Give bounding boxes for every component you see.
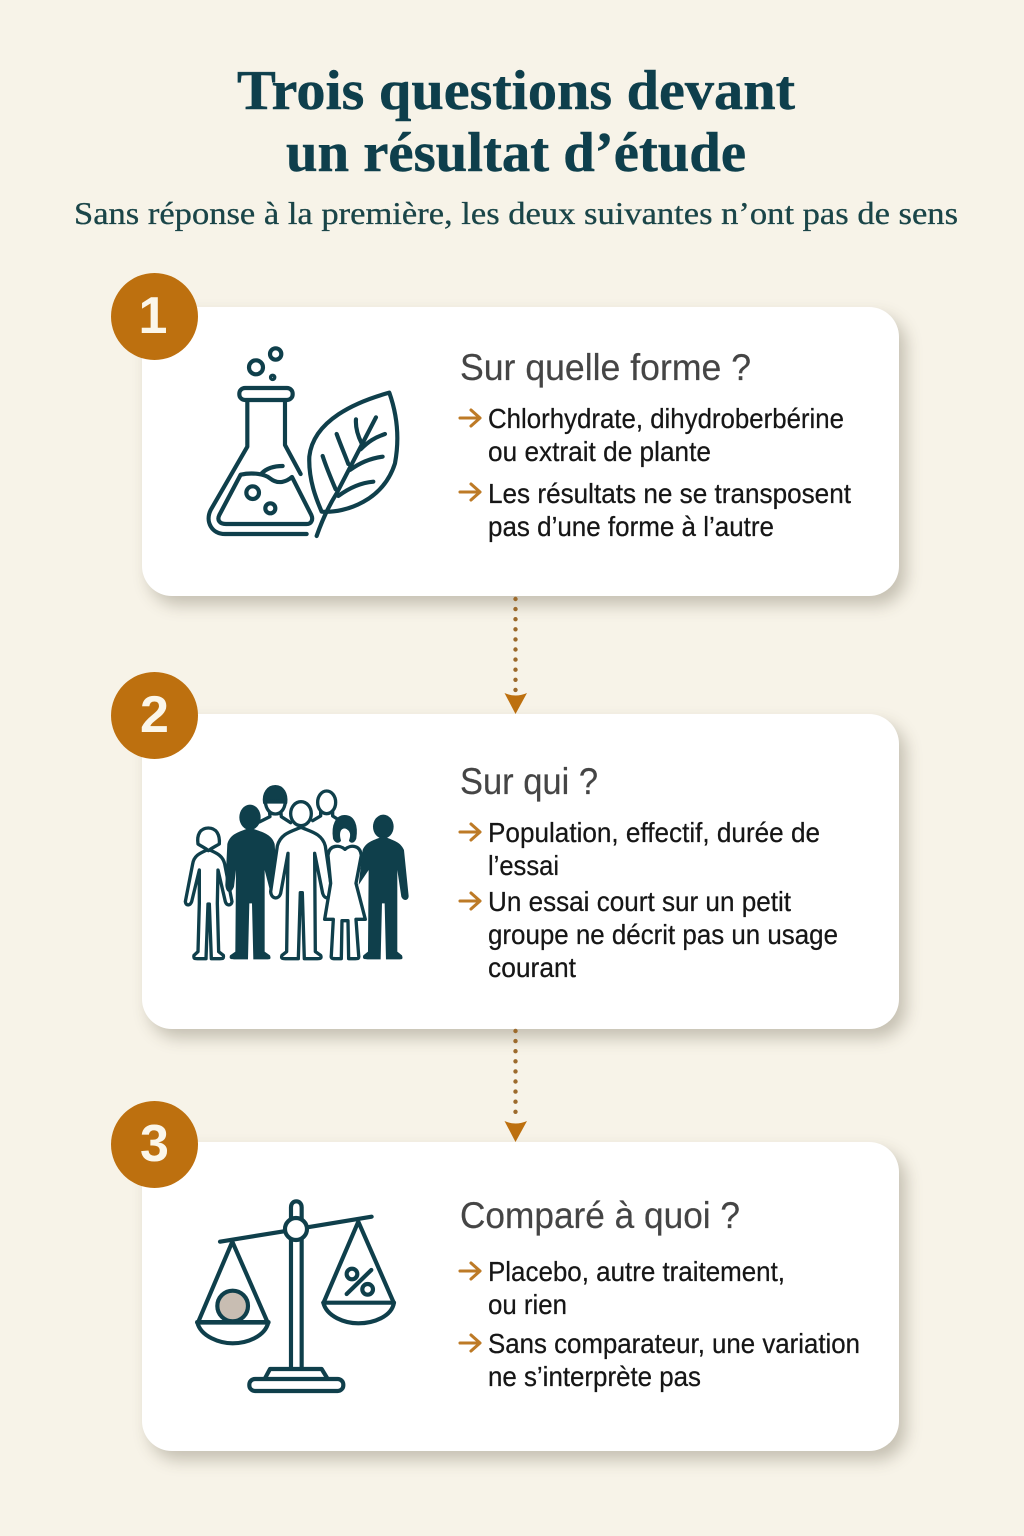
bullet 1: ou rien bbox=[488, 1289, 567, 1320]
heading: Sur quelle forme ? bbox=[460, 347, 751, 388]
bullet 1: Placebo, autre traitement, bbox=[488, 1256, 785, 1287]
bullet 1: ou extrait de plante bbox=[488, 436, 711, 467]
back woman bbox=[259, 787, 291, 823]
back man bbox=[313, 791, 340, 821]
dark man right bbox=[359, 815, 409, 959]
icon: flask and leaf bbox=[209, 348, 397, 536]
bullet 2: Un essai court sur un petit bbox=[488, 886, 791, 917]
arrow 2 to 3 bbox=[504, 1028, 527, 1142]
title: un résultat d’étude bbox=[286, 122, 746, 184]
left child bbox=[185, 828, 232, 959]
centre man bbox=[271, 802, 332, 959]
bullet 2: groupe ne décrit pas un usage bbox=[488, 919, 838, 950]
icon: balance scale bbox=[197, 1201, 394, 1391]
bullet 1 bbox=[460, 403, 844, 467]
bullet 1 bbox=[460, 1256, 785, 1320]
badge 2: 2 bbox=[140, 686, 169, 744]
bullet 2: ne s’interprète pas bbox=[488, 1361, 701, 1392]
woman with dress bbox=[325, 816, 365, 959]
bullet 1: Chlorhydrate, dihydroberbérine bbox=[488, 403, 844, 434]
title: Trois questions devant bbox=[237, 60, 795, 122]
arrow 1 to 2 bbox=[504, 596, 527, 714]
bullet 2: Sans comparateur, une variation bbox=[488, 1328, 860, 1359]
badge 2 bbox=[111, 672, 198, 759]
badge 1 bbox=[111, 273, 198, 360]
badge 3 bbox=[111, 1101, 198, 1188]
bullet 2: pas d’une forme à l’autre bbox=[488, 511, 774, 542]
bullet 1 bbox=[460, 817, 820, 881]
heading: Comparé à quoi ? bbox=[460, 1195, 740, 1236]
bullet 2 bbox=[460, 478, 851, 542]
icon: group of people bbox=[185, 787, 409, 959]
panel: card 1, forme bbox=[142, 307, 899, 596]
panel: card 2, qui bbox=[142, 714, 899, 1029]
panel: card 3, comparaison bbox=[142, 1142, 899, 1451]
bullet 2 bbox=[460, 1328, 860, 1392]
badge 1: 1 bbox=[139, 287, 167, 345]
title bbox=[237, 60, 796, 184]
bullet 2: Les résultats ne se transposent bbox=[488, 478, 851, 509]
subtitle: Sans réponse à la première, les deux suivantes n’ont pas de sens bbox=[74, 195, 958, 231]
bullet 1: l’essai bbox=[488, 850, 559, 881]
heading: Sur qui ? bbox=[460, 761, 598, 802]
dark man left bbox=[225, 805, 277, 959]
bullet 1: Population, effectif, durée de bbox=[488, 817, 820, 848]
badge 3: 3 bbox=[140, 1115, 169, 1173]
bullet 2: courant bbox=[488, 952, 576, 983]
bullet 2 bbox=[460, 886, 838, 983]
